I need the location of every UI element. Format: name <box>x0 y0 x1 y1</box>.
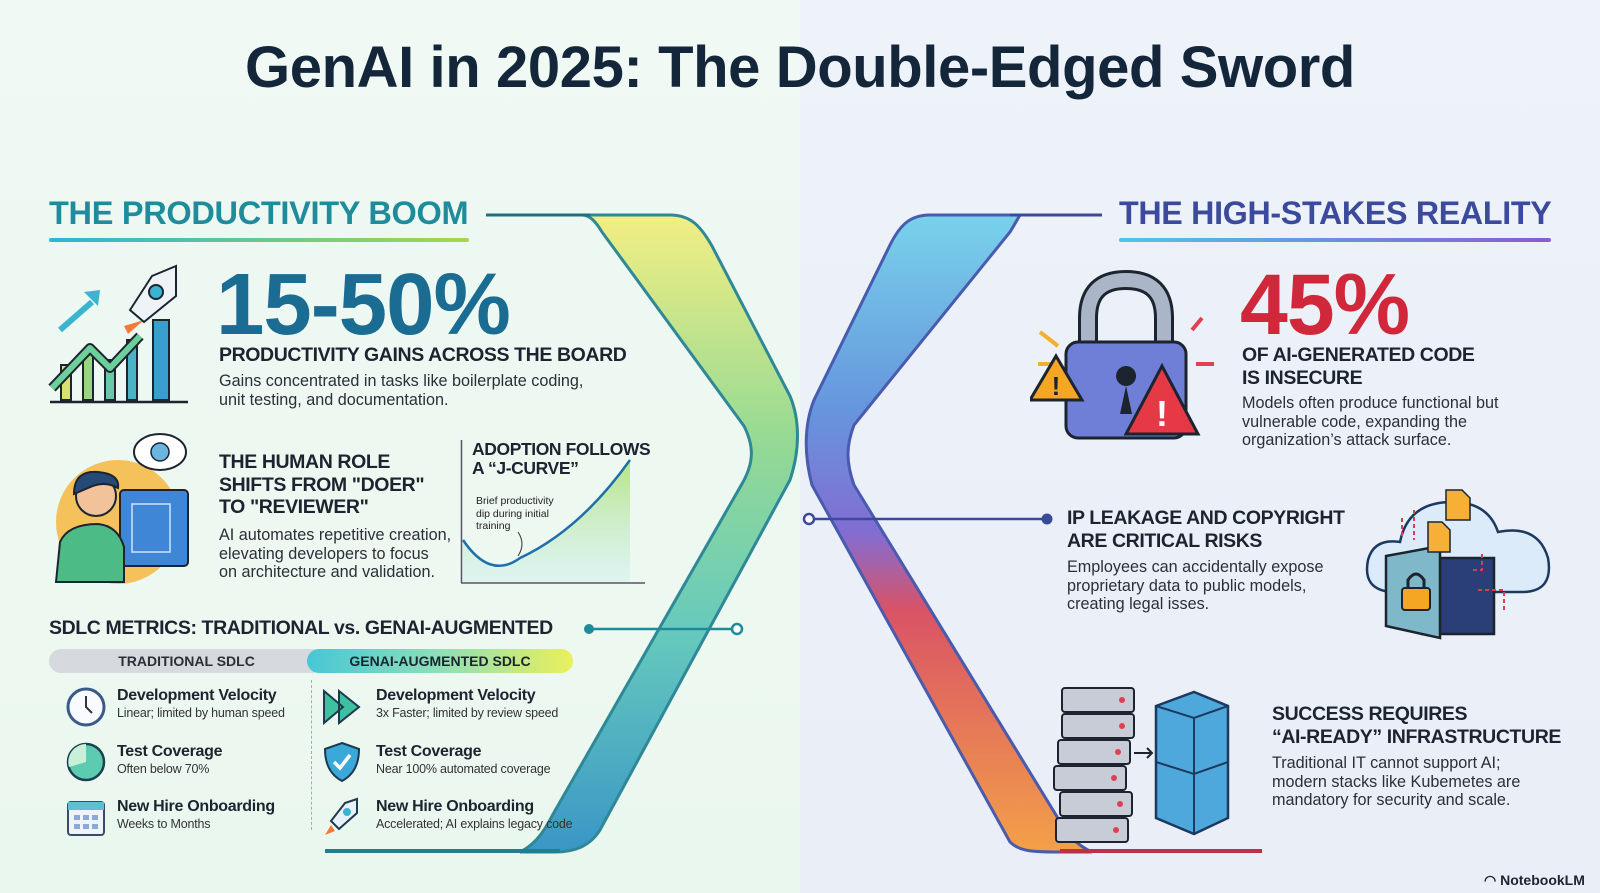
chart: J-curve <box>460 439 650 584</box>
heading: insecure code: IS INSECURE <box>1242 366 1362 388</box>
icon: servers to containers <box>1053 687 1230 843</box>
icon: broken lock with warnings <box>1030 270 1214 440</box>
text: human role: AI automates repetitive creation, <box>219 526 451 544</box>
text: insecure code: Models often produce functional but <box>1242 394 1498 412</box>
text: infrastructure: modern stacks like Kubemetes are <box>1272 773 1520 791</box>
text: IP leakage: creating legal isses. <box>1067 595 1209 613</box>
annotation: training <box>476 520 510 532</box>
text: insecure code: organization’s attack surface. <box>1242 431 1451 449</box>
text: human role: elevating developers to focus <box>219 545 429 563</box>
heading: IP leakage <box>1067 507 1345 552</box>
icon: calendar <box>67 801 105 836</box>
header: traditional <box>49 649 324 673</box>
row: onboarding genai: Accelerated; AI explains legacy code <box>376 817 572 831</box>
row: test coverage genai <box>376 743 550 776</box>
heading: human role <box>219 451 424 518</box>
heading: IP leakage: IP LEAKAGE AND COPYRIGHT <box>1067 507 1345 529</box>
big stat 15-50%: 15-50% <box>216 256 510 353</box>
heading: human role: TO "REVIEWER" <box>219 496 368 518</box>
header: genai <box>307 649 573 673</box>
row: test coverage trad: Often below 70% <box>117 762 209 776</box>
text: gains <box>219 372 583 409</box>
heading: SDLC metrics: SDLC METRICS: TRADITIONAL vs. GENAI-AUGMENTED <box>49 617 553 639</box>
heading: adoption j-curve: A “J-CURVE” <box>472 458 578 478</box>
row: dev velocity genai: 3x Faster; limited by review speed <box>376 706 558 720</box>
title: GenAI in 2025: The Double-Edged Sword <box>245 35 1355 100</box>
row: test coverage genai: Near 100% automated coverage <box>376 762 550 776</box>
heading: adoption j-curve <box>472 439 650 478</box>
big stat 45%: 45% <box>1240 257 1409 353</box>
text: IP leakage: Employees can accidentally expose <box>1067 558 1323 576</box>
row: onboarding genai: New Hire Onboarding <box>376 798 534 815</box>
text: gains: unit testing, and documentation. <box>219 391 448 409</box>
heading: high-stakes reality: THE HIGH-STAKES REALITY <box>1119 195 1551 231</box>
row: dev velocity trad <box>117 687 285 720</box>
icon: clock <box>66 688 106 726</box>
row: dev velocity genai: Development Velocity <box>376 687 535 704</box>
icon: pie <box>66 742 106 782</box>
annotation: Brief productivity <box>476 495 554 507</box>
row: onboarding trad: Weeks to Months <box>117 817 210 831</box>
heading: productivity boom: THE PRODUCTIVITY BOOM <box>49 195 468 231</box>
text: human role: on architecture and validation. <box>219 563 435 581</box>
heading: adoption j-curve: ADOPTION FOLLOWS <box>472 439 650 459</box>
icon: broken lock with warnings: ! <box>1156 393 1168 434</box>
heading: insecure code: OF AI-GENERATED CODE <box>1242 344 1475 366</box>
icon: cloud vault <box>1366 489 1550 640</box>
right ribbon <box>806 215 1262 852</box>
heading: AI-ready infrastructure: SUCCESS REQUIRES <box>1272 703 1467 725</box>
row: dev velocity trad: Linear; limited by human speed <box>117 706 285 720</box>
text: IP leakage: proprietary data to public models, <box>1067 577 1306 595</box>
row: test coverage trad: Test Coverage <box>117 743 222 760</box>
row: onboarding trad <box>117 798 275 831</box>
row: onboarding trad: New Hire Onboarding <box>117 798 275 815</box>
left ribbon <box>325 215 798 852</box>
text: gains: Gains concentrated in tasks like boilerplate coding, <box>219 372 583 390</box>
annotation <box>476 495 554 532</box>
heading: AI-ready infrastructure: “AI-READY” INFRASTRUCTURE <box>1272 726 1561 748</box>
icon: rocket <box>325 798 358 835</box>
heading: insecure code <box>1242 344 1475 388</box>
row: dev velocity trad: Development Velocity <box>117 687 276 704</box>
icon: fast forward <box>323 689 360 725</box>
text: insecure code: vulnerable code, expanding the <box>1242 413 1467 431</box>
connector: IP leakage <box>804 514 1052 524</box>
connector: SDLC <box>584 624 742 634</box>
header: traditional: TRADITIONAL SDLC <box>118 653 255 669</box>
heading: productivity gains: PRODUCTIVITY GAINS ACROSS THE BOARD <box>219 344 626 366</box>
row: test coverage genai: Test Coverage <box>376 743 481 760</box>
heading: human role: THE HUMAN ROLE <box>219 451 390 473</box>
text: infrastructure: Traditional IT cannot support AI; <box>1272 754 1501 772</box>
icon: growth chart rocket <box>48 264 188 404</box>
heading: human role: SHIFTS FROM "DOER" <box>219 474 424 496</box>
text: IP leakage <box>1067 558 1323 613</box>
text: infrastructure: mandatory for security and scale. <box>1272 791 1510 809</box>
row: onboarding genai <box>376 798 572 831</box>
row: dev velocity genai <box>376 687 558 720</box>
heading: AI-ready infrastructure <box>1272 703 1561 748</box>
icon: person thinking <box>54 433 189 584</box>
header: genai: GENAI-AUGMENTED SDLC <box>349 653 531 669</box>
comparison table <box>49 649 573 836</box>
logo: NotebookLM: ◠ NotebookLM <box>1484 872 1585 888</box>
icon: broken lock with warnings: ! <box>1052 371 1060 401</box>
icon: shield <box>324 742 360 782</box>
row: test coverage trad <box>117 743 222 776</box>
text: human role <box>219 526 451 581</box>
text: insecure code <box>1242 394 1498 449</box>
heading: IP leakage: ARE CRITICAL RISKS <box>1067 530 1262 552</box>
annotation: dip during initial <box>476 508 549 520</box>
text: infrastructure <box>1272 754 1520 809</box>
